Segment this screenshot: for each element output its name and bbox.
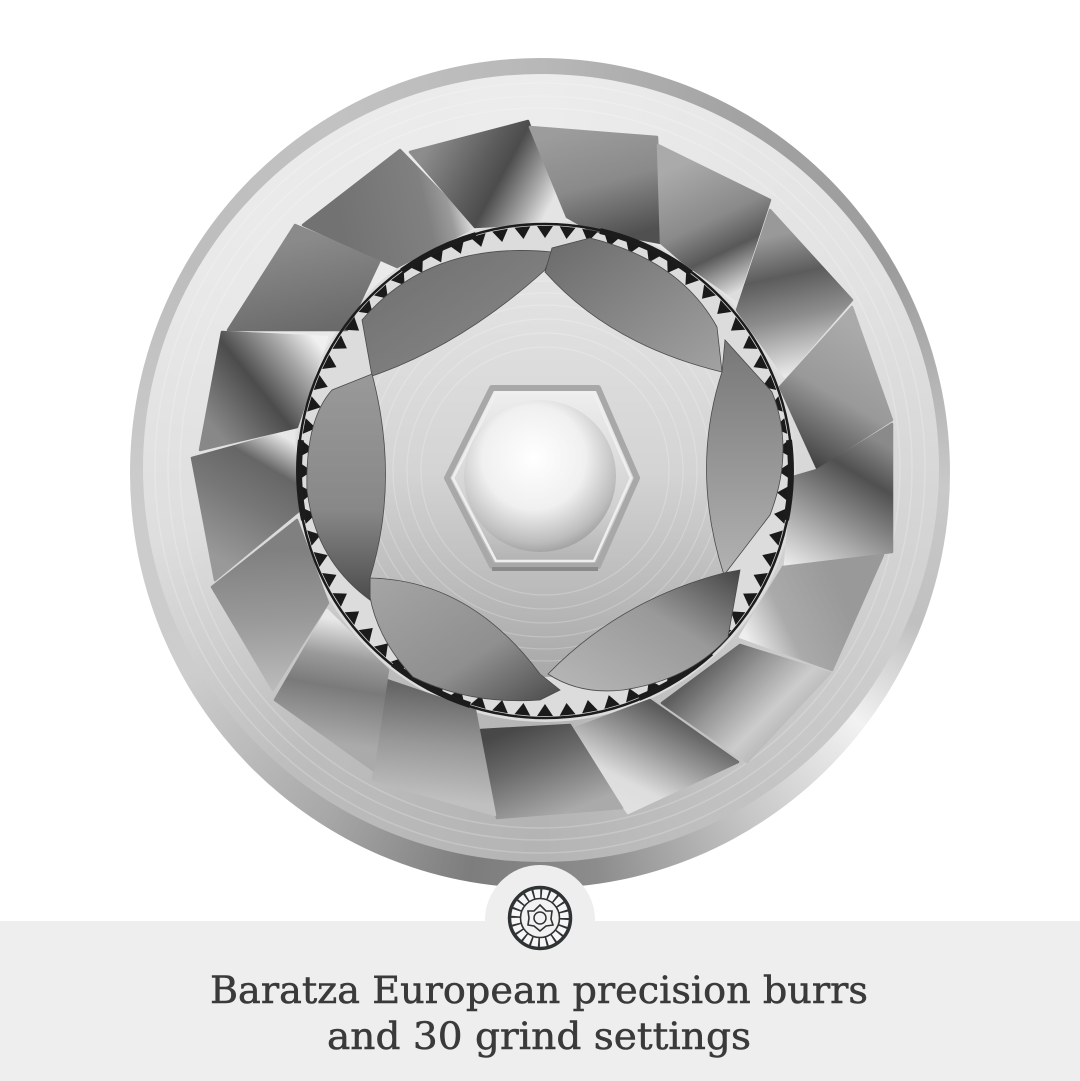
grinder burr disc <box>130 58 950 886</box>
caption: and 30 grind settings <box>327 1015 751 1058</box>
caption: Baratza European precision burrs <box>210 969 868 1012</box>
outer cutting blades <box>192 121 892 818</box>
bright tooth track <box>294 220 796 722</box>
machining rings on burr face <box>155 83 925 853</box>
hex bolt with dome head <box>447 388 637 569</box>
central star hub <box>339 265 751 677</box>
caption band <box>0 865 1080 1081</box>
icon: burr <box>510 888 570 948</box>
icon tab <box>485 865 595 975</box>
outer metal rim <box>130 58 950 888</box>
tooth ring <box>298 224 792 718</box>
machined burr face <box>143 74 939 862</box>
inner lens petals <box>307 238 783 701</box>
caption <box>210 969 868 1058</box>
